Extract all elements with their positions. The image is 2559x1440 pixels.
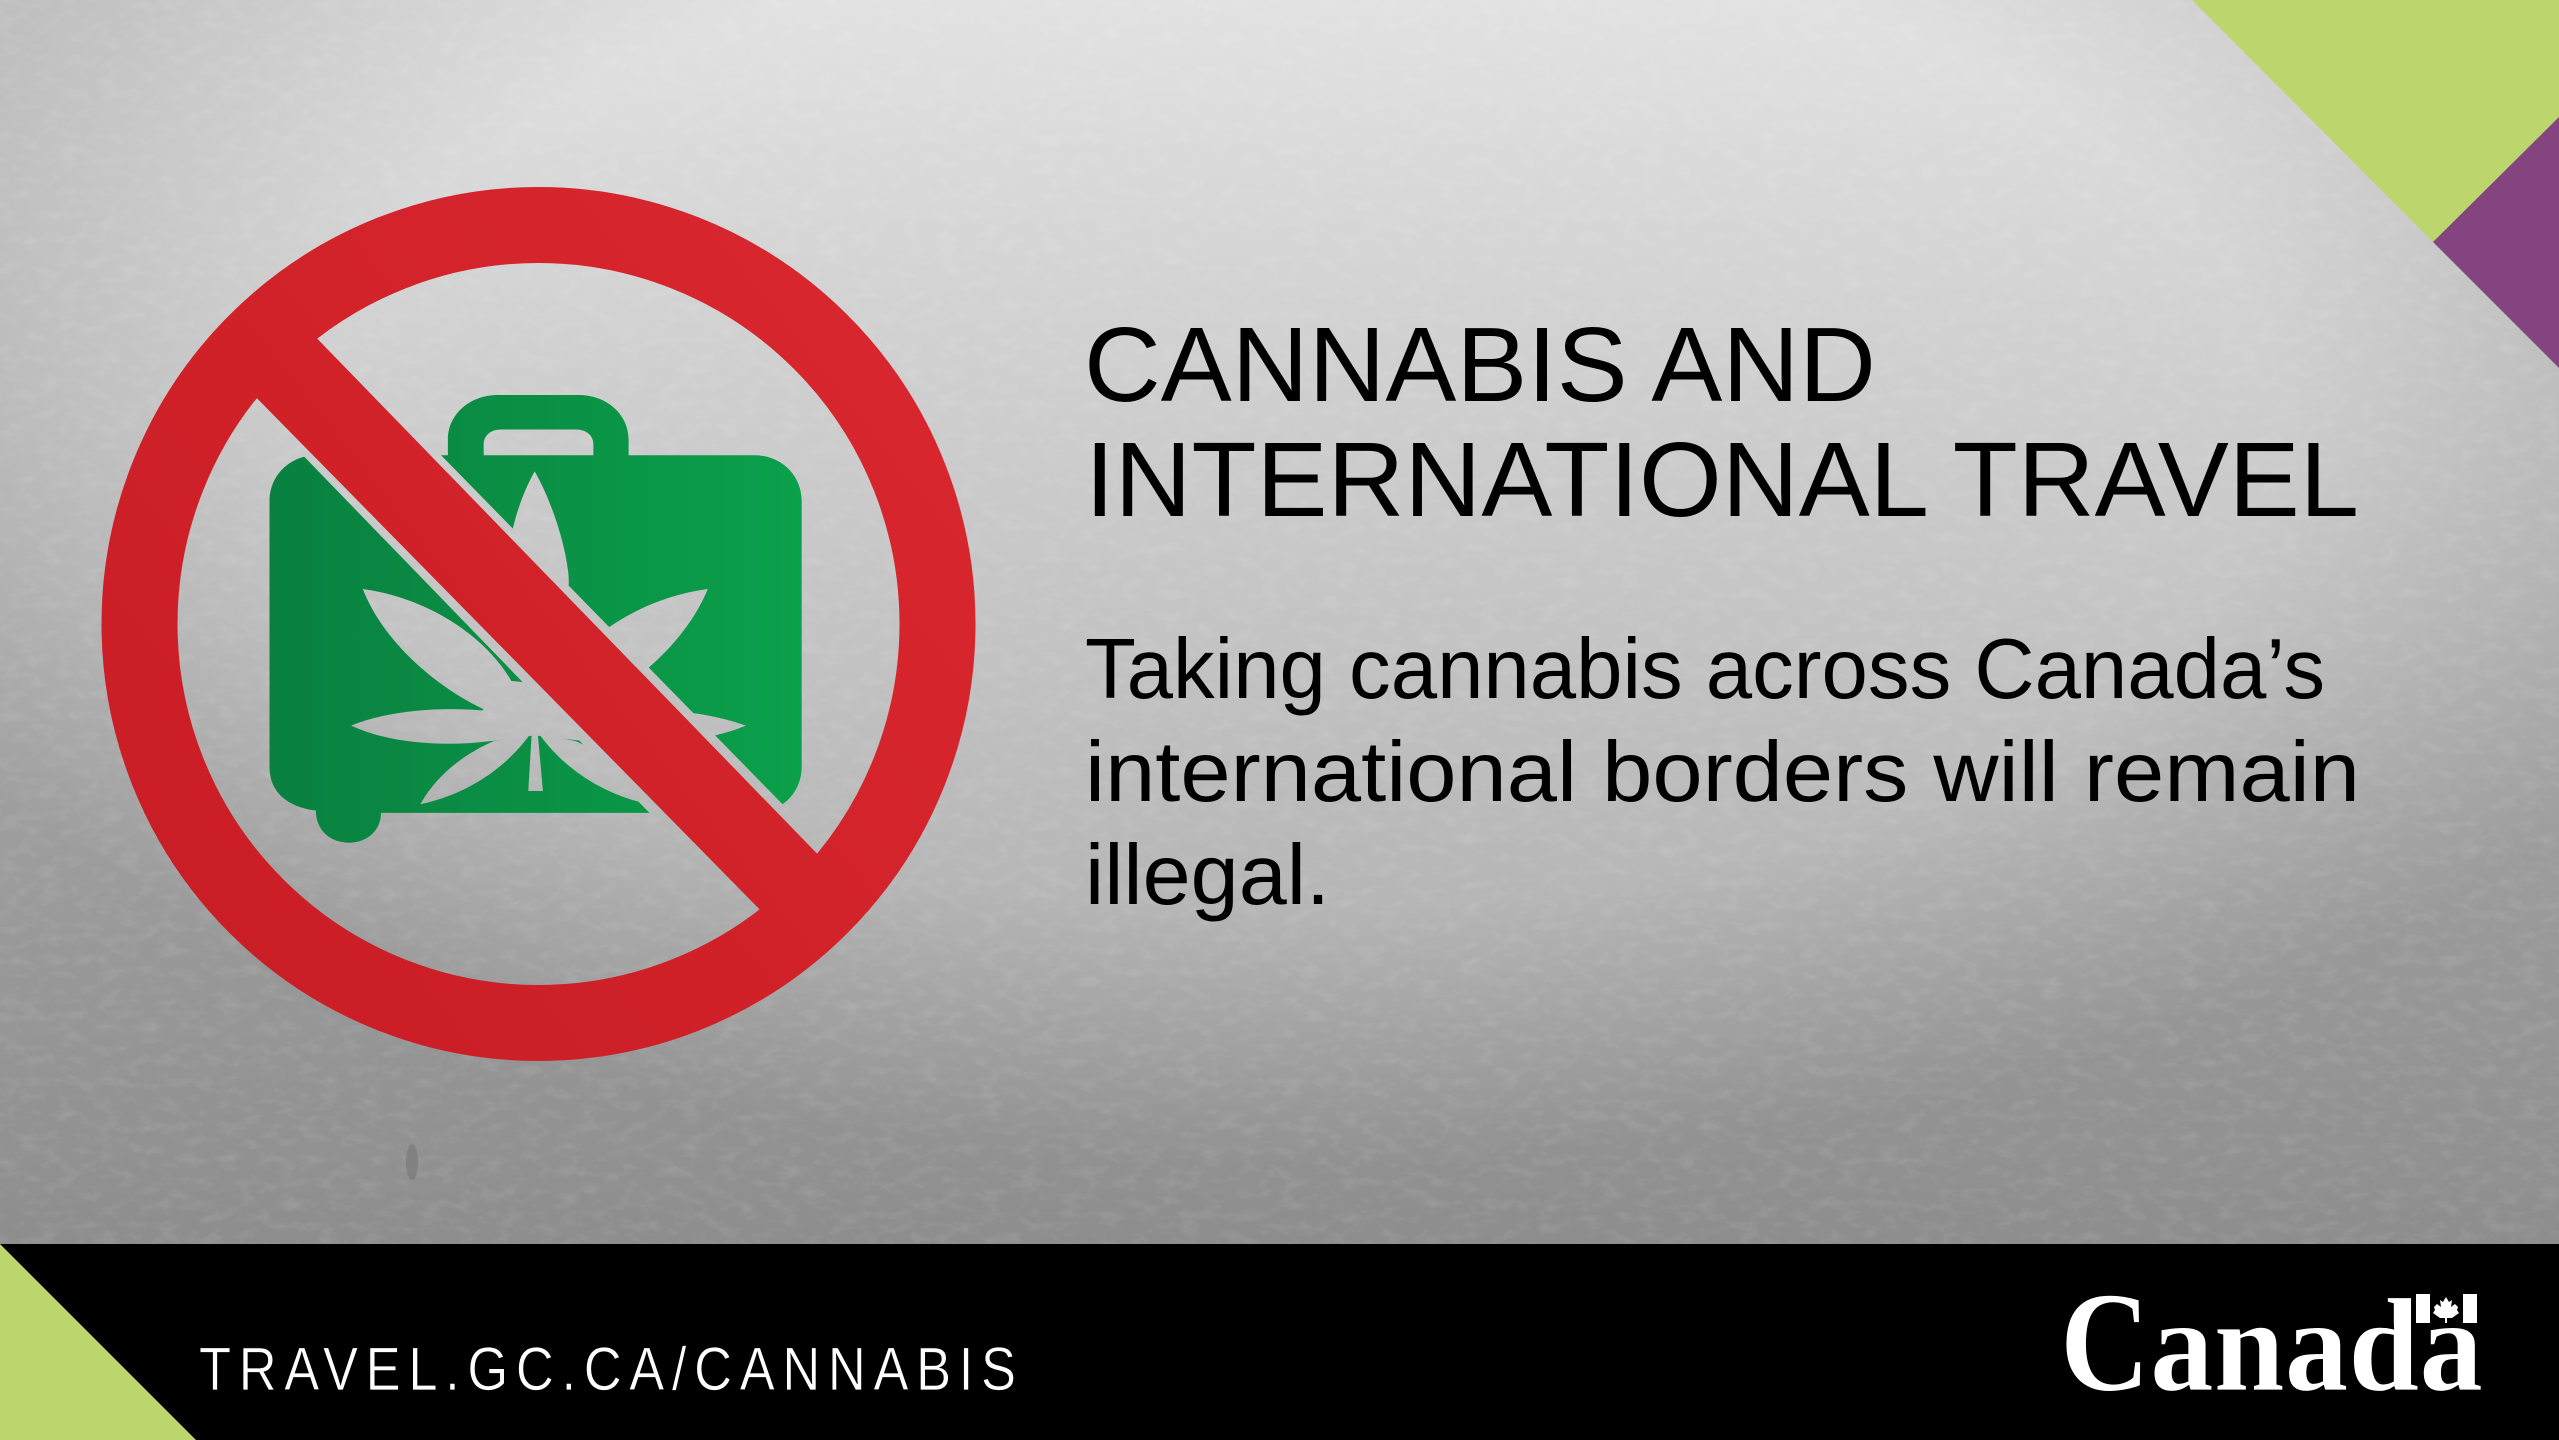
footer url: TRAVEL.GC.CA/CANNABIS (199, 1335, 1016, 1404)
top-right green corner triangle (2192, 0, 2559, 242)
top-right purple corner triangle (2433, 117, 2559, 368)
wordmark text: C (2060, 1263, 2150, 1421)
icon: no cannabis in luggage (140, 225, 938, 1023)
wordmark text: anada (2150, 1271, 2483, 1419)
icon: green suitcase with cannabis leaf (270, 395, 802, 843)
icon: red prohibition slash (243, 324, 831, 921)
body text: international borders will remain (1085, 725, 2360, 820)
body text (1085, 622, 2360, 923)
icon: red prohibition ring (140, 225, 938, 1023)
title: CANNABIS AND (1084, 306, 1876, 424)
Canada wordmark (2060, 1263, 2483, 1421)
footer green corner triangle (0, 1244, 196, 1440)
Canadian flag symbol (2416, 1294, 2477, 1323)
footer band (0, 1244, 2559, 1440)
body text: Taking cannabis across Canada’s (1085, 622, 2325, 717)
title: INTERNATIONAL TRAVEL (1085, 421, 2359, 539)
title (1084, 306, 2359, 539)
body text: illegal. (1085, 828, 1330, 923)
